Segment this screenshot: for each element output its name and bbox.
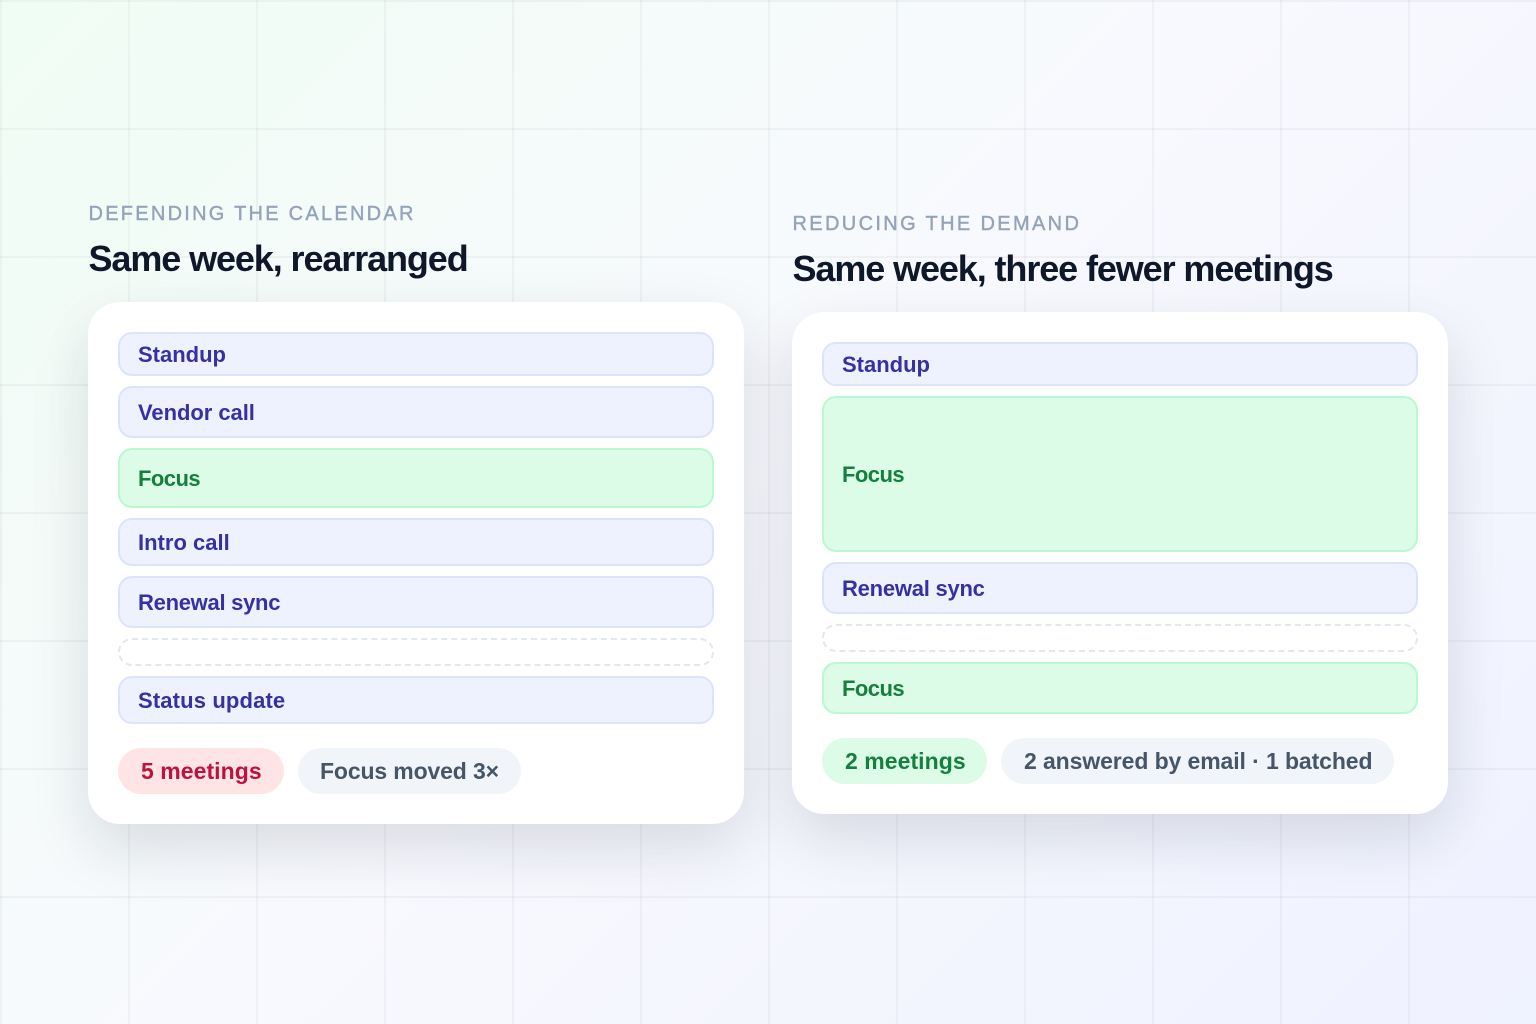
heading: same week, three fewer meetings: Same week, three fewer meetings: [792, 248, 1333, 289]
chip: 5 meetings: [118, 748, 284, 794]
heading: same week, rearranged: Same week, rearranged: [88, 238, 468, 279]
meeting: vendor call: [118, 386, 714, 438]
focus block: [118, 448, 714, 508]
meeting: vendor call: Vendor call: [138, 400, 255, 425]
eyebrow: reducing the demand: REDUCING THE DEMAND: [792, 213, 1081, 235]
focus block: large: [822, 396, 1418, 552]
panel: reducing the demand: [774, 213, 1466, 856]
card: rearranged calendar: [88, 302, 744, 824]
focus block: small: [822, 662, 1418, 714]
chip: 5 meetings: 5 meetings: [141, 758, 262, 784]
empty slot: [822, 624, 1418, 652]
eyebrow: defending the calendar: DEFENDING THE CALENDAR: [88, 203, 416, 225]
card: reduced calendar: [792, 312, 1448, 814]
meeting: renewal sync: Renewal sync: [842, 576, 985, 601]
meeting: intro call: [118, 518, 714, 566]
focus block: small: Focus: [842, 676, 904, 701]
meeting: standup: [822, 342, 1418, 386]
chip: answered by email and batched: 2 answered by email · 1 batched: [1024, 748, 1372, 774]
meeting: standup: Standup: [138, 342, 226, 367]
meeting: status update: [118, 676, 714, 724]
focus block: large: Focus: [842, 462, 904, 487]
focus block: Focus: [138, 466, 200, 491]
meeting: intro call: Intro call: [138, 530, 230, 555]
meeting: standup: Standup: [842, 352, 930, 377]
chip: answered by email and batched: [1001, 738, 1394, 784]
meeting: renewal sync: [822, 562, 1418, 614]
meeting: renewal sync: [118, 576, 714, 628]
meeting: status update: Status update: [138, 688, 285, 713]
chip: 2 meetings: [822, 738, 987, 784]
empty slot: [118, 638, 714, 666]
chip: focus moved 3x: [298, 748, 521, 794]
meeting: standup: [118, 332, 714, 376]
chip: 2 meetings: 2 meetings: [845, 748, 966, 774]
chip: focus moved 3x: Focus moved 3×: [320, 758, 499, 784]
panel: defending the calendar: [70, 203, 762, 866]
meeting: renewal sync: Renewal sync: [138, 590, 280, 615]
